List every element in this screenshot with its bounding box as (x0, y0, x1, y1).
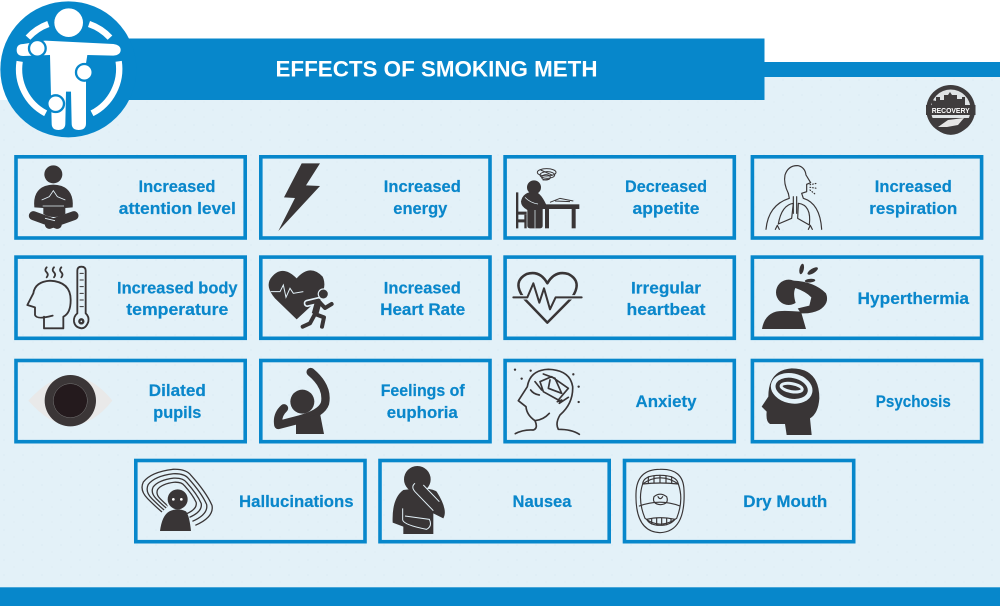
card: Increased attention level (16, 157, 245, 238)
card: Increased respiration (752, 157, 982, 238)
card: Dilated pupils: Dilated (149, 381, 206, 400)
card: Increased attention level: attention level (119, 199, 236, 218)
card: Feelings of euphoria (261, 360, 490, 442)
card: Feelings of euphoria: Feelings of (381, 381, 465, 400)
card: Increased body temperature: Increased body (117, 278, 238, 298)
icon: lightning bolt (278, 163, 320, 231)
card: Anxiety (505, 360, 734, 442)
icon: head with spiral (762, 368, 819, 435)
card: Feelings of euphoria: euphoria (387, 403, 458, 422)
icon: head and thermometer (27, 267, 89, 328)
icon: person covering mouth (393, 466, 445, 534)
icon: lungs and head outline (766, 166, 822, 229)
card: Dry Mouth: Dry Mouth (743, 492, 827, 511)
icon: open mouth (636, 469, 684, 533)
icon: heart with runner (269, 270, 332, 327)
icon: eye (28, 375, 112, 426)
card: Increased body temperature: temperature (126, 300, 228, 319)
card: Irregular heartbeat: heartbeat (626, 300, 706, 319)
card: Hyperthermia: Hyperthermia (858, 289, 970, 308)
card: Decreased appetite: appetite (632, 199, 700, 218)
title: EFFECTS OF SMOKING METH (276, 57, 598, 82)
card: Increased respiration: respiration (869, 199, 957, 218)
icon: person with raised arm (278, 372, 326, 434)
card: Decreased appetite: Decreased (625, 177, 707, 196)
card: Increased Heart Rate: Heart Rate (380, 300, 465, 319)
icon: person at table (516, 169, 579, 228)
card: Increased attention level: Increased (138, 177, 216, 196)
card: Psychosis (752, 360, 982, 442)
card: Hyperthermia (752, 257, 982, 338)
icon: body figure badge (0, 1, 136, 137)
icon: recovery logo: RECOVERY (932, 106, 970, 115)
card: Increased energy (261, 157, 490, 238)
card: Irregular heartbeat: Irregular (631, 278, 701, 298)
card: Anxiety: Anxiety (636, 392, 697, 411)
card: Increased energy: energy (393, 199, 448, 218)
card: Increased Heart Rate: Increased (384, 278, 461, 298)
icon: recovery logo (926, 85, 976, 135)
card: Nausea (380, 460, 609, 542)
icon: heart outline with pulse (513, 273, 582, 323)
card: Decreased appetite (505, 157, 734, 238)
card: Dry Mouth (624, 460, 854, 542)
card: Increased respiration: Increased (875, 177, 952, 196)
icon: meditating person (33, 165, 74, 224)
card: Increased body temperature (16, 257, 245, 338)
header banner (100, 38, 1000, 100)
card: Psychosis: Psychosis (876, 392, 951, 411)
card: Increased energy: Increased (384, 177, 461, 196)
icon: head with scribbled mind (514, 368, 580, 434)
card: Hallucinations: Hallucinations (239, 492, 354, 511)
card: Increased Heart Rate (261, 257, 490, 338)
footer bar (0, 587, 1000, 606)
icon: person with concentric waves (142, 469, 212, 531)
card: Irregular heartbeat (505, 257, 734, 338)
icon: person holding forehead (762, 263, 827, 329)
card: Nausea: Nausea (512, 492, 572, 511)
card: Hallucinations (136, 460, 365, 542)
card: Dilated pupils: pupils (153, 403, 201, 422)
card: Dilated pupils (16, 360, 245, 442)
